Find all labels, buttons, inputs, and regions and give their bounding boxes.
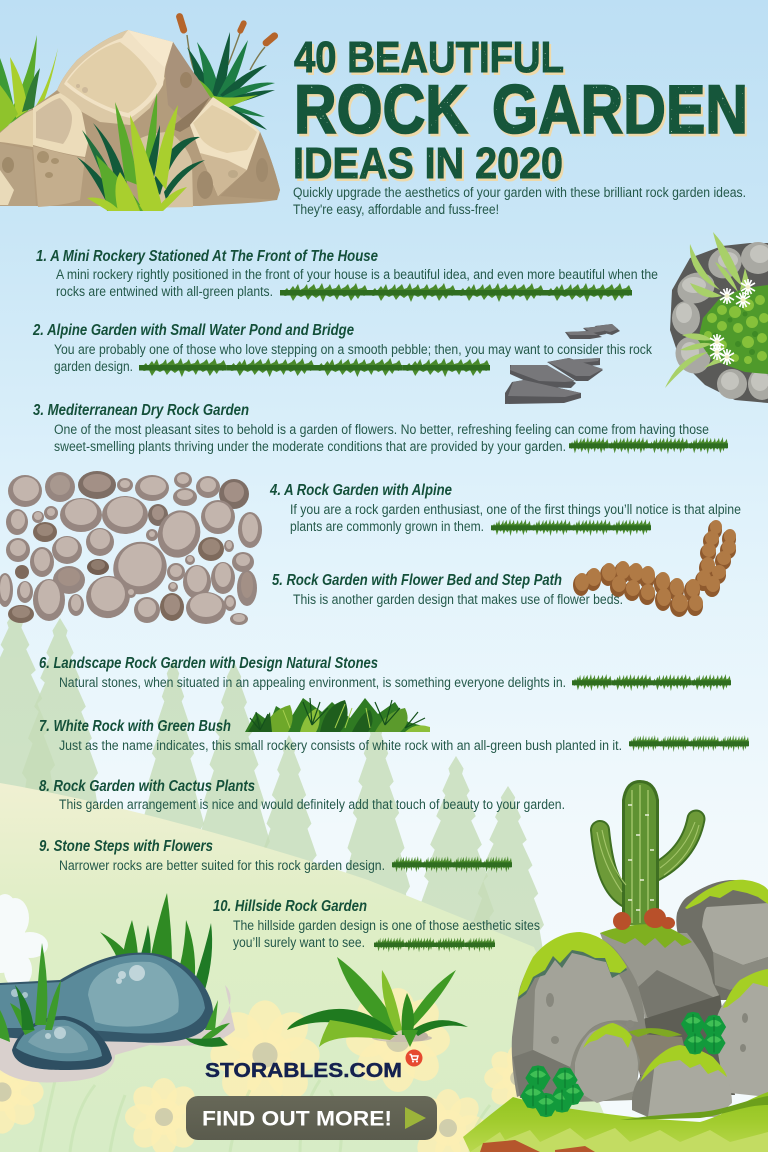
- small blue rock: [12, 1016, 112, 1070]
- list item 4: [269, 482, 741, 536]
- body 3: [54, 422, 709, 454]
- grass divider 3: [569, 437, 728, 454]
- body 4: plants are commonly grown in them.: [290, 519, 484, 534]
- illustration: brown stone path: [573, 520, 736, 617]
- body 9: Narrower rocks are better suited for this rock garden design.: [59, 858, 385, 873]
- back grass: [100, 893, 212, 990]
- left rock: [33, 93, 88, 157]
- illustration: tropical bush: [245, 698, 430, 732]
- dark gap: [640, 995, 735, 1095]
- body 6: Natural stones, when situated in an appealing environment, is something everyone delights in.: [59, 675, 566, 690]
- body 5: This is another garden design that makes use of flower beds.: [293, 592, 623, 607]
- grass divider 6: [572, 674, 731, 691]
- grass divider 1: [280, 283, 632, 302]
- title: 40 BEAUTIFUL: [294, 33, 564, 82]
- heading 7: 7. White Rock with Green Bush: [39, 718, 231, 735]
- list item 8: [39, 778, 565, 812]
- body 7: Just as the name indicates, this small rockery consists of white rock with an all-green bush planted in it.: [59, 738, 622, 753]
- white flowers: [710, 279, 755, 365]
- title: IDEAS IN 2020: [293, 139, 563, 188]
- orange pebbles: [613, 908, 675, 930]
- illustration: stepping stones: [505, 324, 620, 404]
- illustration: stone ring with flowers: [665, 232, 768, 403]
- ground: [463, 1092, 768, 1152]
- button: find out more: [186, 1096, 437, 1140]
- logo: storables.com: STORABLES.COM: [205, 1060, 402, 1082]
- list item 6: [39, 655, 731, 691]
- grass divider 9: [392, 856, 512, 873]
- arrow: [405, 1107, 426, 1129]
- list item 9: [39, 838, 512, 873]
- rock pile: [0, 30, 280, 208]
- subtitle: [293, 185, 746, 217]
- big blue rock: [0, 953, 213, 1043]
- right lower rock: [717, 970, 768, 1097]
- right grass and cattails: [175, 12, 279, 130]
- button: find out more: FIND OUT MORE!: [202, 1108, 392, 1130]
- moss centre: [698, 285, 768, 374]
- rock shadow: [0, 985, 235, 1082]
- body 1: A mini rockery rightly positioned in the front of your house is a beautiful idea, and even more beautiful when the: [56, 267, 658, 282]
- body 3: One of the most pleasant sites to behold is a garden of flowers. No better, refreshing feeling can come from having those: [54, 422, 709, 437]
- heading 2: 2. Alpine Garden with Small Water Pond and Bridge: [32, 322, 354, 339]
- body 3: sweet-smelling plants thriving under the moderate conditions that are provided by your garden.: [54, 439, 566, 454]
- leafy plants: [520, 1012, 726, 1117]
- body 10: The hillside garden design is one of those aesthetic sites: [233, 918, 540, 933]
- top rock band: [57, 30, 165, 125]
- illustration: pebble wall: [0, 471, 262, 625]
- body 4: [290, 502, 741, 534]
- body 10: [233, 918, 540, 950]
- body 2: You are probably one of those who love stepping on a smooth pebble; then, you may want to consider this rock: [54, 342, 652, 357]
- background flowers: [0, 894, 552, 1152]
- heading 4: 4. A Rock Garden with Alpine: [269, 482, 452, 499]
- body 2: garden design.: [54, 359, 133, 374]
- list item 2: [32, 322, 652, 377]
- logo: storables.com: [205, 1050, 422, 1082]
- cactus: [597, 780, 699, 925]
- heading 9: 9. Stone Steps with Flowers: [39, 838, 213, 855]
- front grass tuft: [77, 93, 205, 211]
- left grass tuft: [0, 35, 58, 135]
- list item 3: [33, 402, 728, 454]
- heading 3: 3. Mediterranean Dry Rock Garden: [33, 402, 249, 419]
- body 2: [54, 342, 652, 374]
- front rock: [632, 1057, 732, 1117]
- pale leaves: [665, 232, 750, 388]
- heading 1: 1. A Mini Rockery Stationed At The Front of The House: [36, 248, 378, 265]
- body 8: This garden arrangement is nice and would definitely add that touch of beauty to your garden.: [59, 797, 565, 812]
- illustration: blue rocks with grass: [0, 893, 235, 1082]
- pale trees: [0, 610, 544, 956]
- grass divider 4: [491, 519, 651, 536]
- middle rock: [600, 933, 720, 1027]
- illustration: beige rocks with grass: [0, 12, 280, 211]
- heading 8: 8. Rock Garden with Cactus Plants: [39, 778, 255, 795]
- top rock shade: [165, 42, 210, 125]
- heading 5: 5. Rock Garden with Flower Bed and Step Path: [272, 572, 562, 589]
- grass divider 10: [374, 937, 495, 952]
- body 1: [56, 267, 658, 299]
- body 1: rocks are entwined with all-green plants.: [56, 284, 273, 299]
- illustration: small green plant: [287, 957, 468, 1047]
- heading 6: 6. Landscape Rock Garden with Design Natural Stones: [39, 655, 378, 672]
- list item 1: [36, 248, 658, 302]
- grass divider 7: [629, 735, 749, 752]
- grass divider 2: [139, 358, 490, 377]
- front grass: [0, 943, 230, 1047]
- top rock light face: [64, 30, 173, 118]
- moss: [518, 880, 768, 1082]
- hill: [0, 783, 620, 1152]
- cart badge: [406, 1050, 422, 1066]
- far right rock: [676, 880, 768, 1000]
- list item 10: [213, 898, 540, 952]
- right rock: [190, 97, 260, 196]
- body 10: you’ll surely want to see.: [233, 935, 365, 950]
- list item 5: [272, 572, 623, 607]
- middle rock behind grass: [133, 132, 193, 208]
- title: [293, 33, 748, 188]
- subtitle: They're easy, affordable and fuss-free!: [293, 202, 499, 217]
- illustration: mossy rock cluster with cactus: [463, 780, 768, 1152]
- small back rocks: [628, 1033, 690, 1075]
- large left rock: [512, 933, 648, 1097]
- heading 10: 10. Hillside Rock Garden: [213, 898, 367, 915]
- list item 7: [39, 718, 749, 753]
